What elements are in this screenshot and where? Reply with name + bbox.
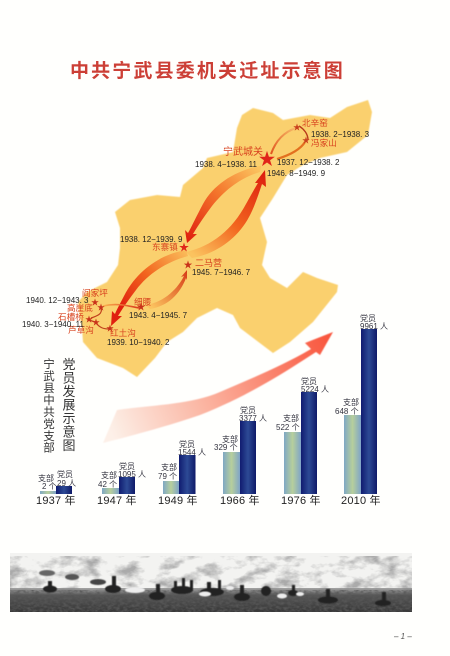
title: 中共宁武县委机关迁址示意图 (70, 59, 345, 82)
date labels: 1937. 12−1938. 2 (277, 158, 340, 167)
bar value labels: 42 个 (98, 480, 117, 489)
bar value labels: 支部 (161, 462, 177, 472)
location stars: ★ (136, 302, 146, 312)
bar value labels: 522 个 (276, 423, 300, 432)
bar value labels: 3377 人 (239, 414, 267, 423)
bar value labels: 79 个 (158, 472, 177, 481)
arrow: Gaoyadi to Xiyao (103, 305, 139, 308)
bar value labels: 支部 (222, 434, 238, 444)
place names: 宁武城关 (223, 145, 263, 158)
place names: 二马营 (195, 257, 222, 268)
bar value labels: 1095 人 (118, 470, 146, 479)
arrow: Xiyao to Ermaying (146, 270, 187, 309)
place names (58, 117, 337, 338)
date labels: 1938. 4−1938. 11 (195, 160, 257, 169)
location stars: ★ (183, 260, 193, 270)
bar value labels: 支部 (283, 413, 299, 423)
location stars: ★ (92, 318, 100, 327)
location stars: ★ (106, 324, 114, 333)
big growth arrow (103, 332, 333, 443)
location stars: ★ (302, 136, 310, 145)
location stars (85, 123, 310, 333)
year labels: 2010 年 (341, 493, 381, 507)
bar chart (36, 313, 388, 507)
bar value labels: 党员 (360, 313, 376, 323)
bars 1947 (102, 477, 135, 494)
place names: 北辛窑 (302, 117, 328, 128)
small arcs in the southwest (89, 308, 109, 329)
year labels: 1947 年 (97, 493, 137, 507)
bar value labels (38, 313, 388, 491)
year labels (36, 493, 381, 507)
bar value labels: 5224 人 (301, 385, 329, 394)
place names: 东寨镇 (152, 241, 178, 252)
date labels: 1940. 3−1940. 11 (22, 320, 84, 329)
date labels: 1945. 7−1946. 7 (192, 268, 251, 277)
location stars: ★ (179, 243, 189, 254)
place names: 冯家山 (311, 137, 337, 148)
year labels: 1976 年 (281, 493, 321, 507)
star: county seat: ★ (258, 150, 276, 169)
arrow: county seat to Dongzhai (185, 166, 261, 243)
date labels: 1938. 2−1938. 3 (311, 130, 370, 139)
bar value labels: 9961 人 (360, 322, 388, 331)
bars 1976 (284, 392, 317, 494)
bar value labels: 党员 (119, 461, 135, 471)
bars 1949 (163, 455, 196, 494)
white horses and dust (125, 586, 304, 598)
riders silhouettes (39, 570, 391, 606)
map of Ningwu county (22, 100, 372, 377)
date labels: 1938. 12−1939. 9 (120, 235, 183, 244)
date labels: 1940. 12−1943. 3 (26, 296, 89, 305)
year labels: 1937 年 (36, 493, 76, 507)
place names: 高崖底 (67, 302, 93, 313)
place names: 细腰 (134, 296, 152, 307)
date labels (22, 130, 370, 347)
small arcs in the north (271, 126, 308, 159)
bar value labels: 党员 (57, 469, 73, 479)
bars 2010 (344, 329, 377, 494)
bar value labels: 329 个 (214, 443, 238, 452)
page number: – 1 – (393, 632, 412, 641)
location stars: ★ (293, 123, 301, 132)
bar value labels: 支部 (38, 473, 54, 483)
bar value labels: 支部 (101, 470, 117, 480)
bar value labels: 党员 (301, 376, 317, 386)
date labels: 1939. 10−1940. 2 (107, 338, 170, 347)
bar value labels: 支部 (343, 397, 359, 407)
year labels: 1966 年 (220, 493, 260, 507)
bar value labels: 党员 (240, 405, 256, 415)
location stars: ★ (91, 298, 99, 307)
arrow: Dongzhai to Hongtugou (111, 250, 188, 326)
bar value labels: 2 个 (42, 482, 57, 491)
bar value labels: 党员 (179, 439, 195, 449)
place names: 红土沟 (110, 327, 136, 338)
bars 1937 (40, 486, 72, 494)
date labels: 1946. 8−1949. 9 (267, 169, 326, 178)
route arrows (89, 126, 308, 329)
date labels: 1943. 4−1945. 7 (129, 311, 188, 320)
bar value labels: 29 人 (57, 479, 76, 488)
bar value labels: 648 个 (335, 407, 359, 416)
vertical chart heading (43, 357, 76, 454)
map: county shape (78, 100, 372, 377)
bars 1966 (223, 421, 256, 494)
place names: 阎家坪 (82, 287, 108, 298)
arrow: Ermaying to county seat (186, 170, 266, 258)
year labels: 1949 年 (158, 493, 198, 507)
location stars: ★ (97, 303, 105, 312)
heading column: Ningwu county party branches: 宁武县中共党支部 (43, 357, 55, 454)
location stars: ★ (85, 315, 93, 324)
photo: cavalry charge (10, 553, 412, 612)
heading column: party member development: 党员发展示意图 (62, 357, 76, 453)
place names: 芦草沟 (68, 324, 94, 335)
place names: 石槽桥 (58, 311, 84, 322)
bar value labels: 1544 人 (178, 448, 206, 457)
